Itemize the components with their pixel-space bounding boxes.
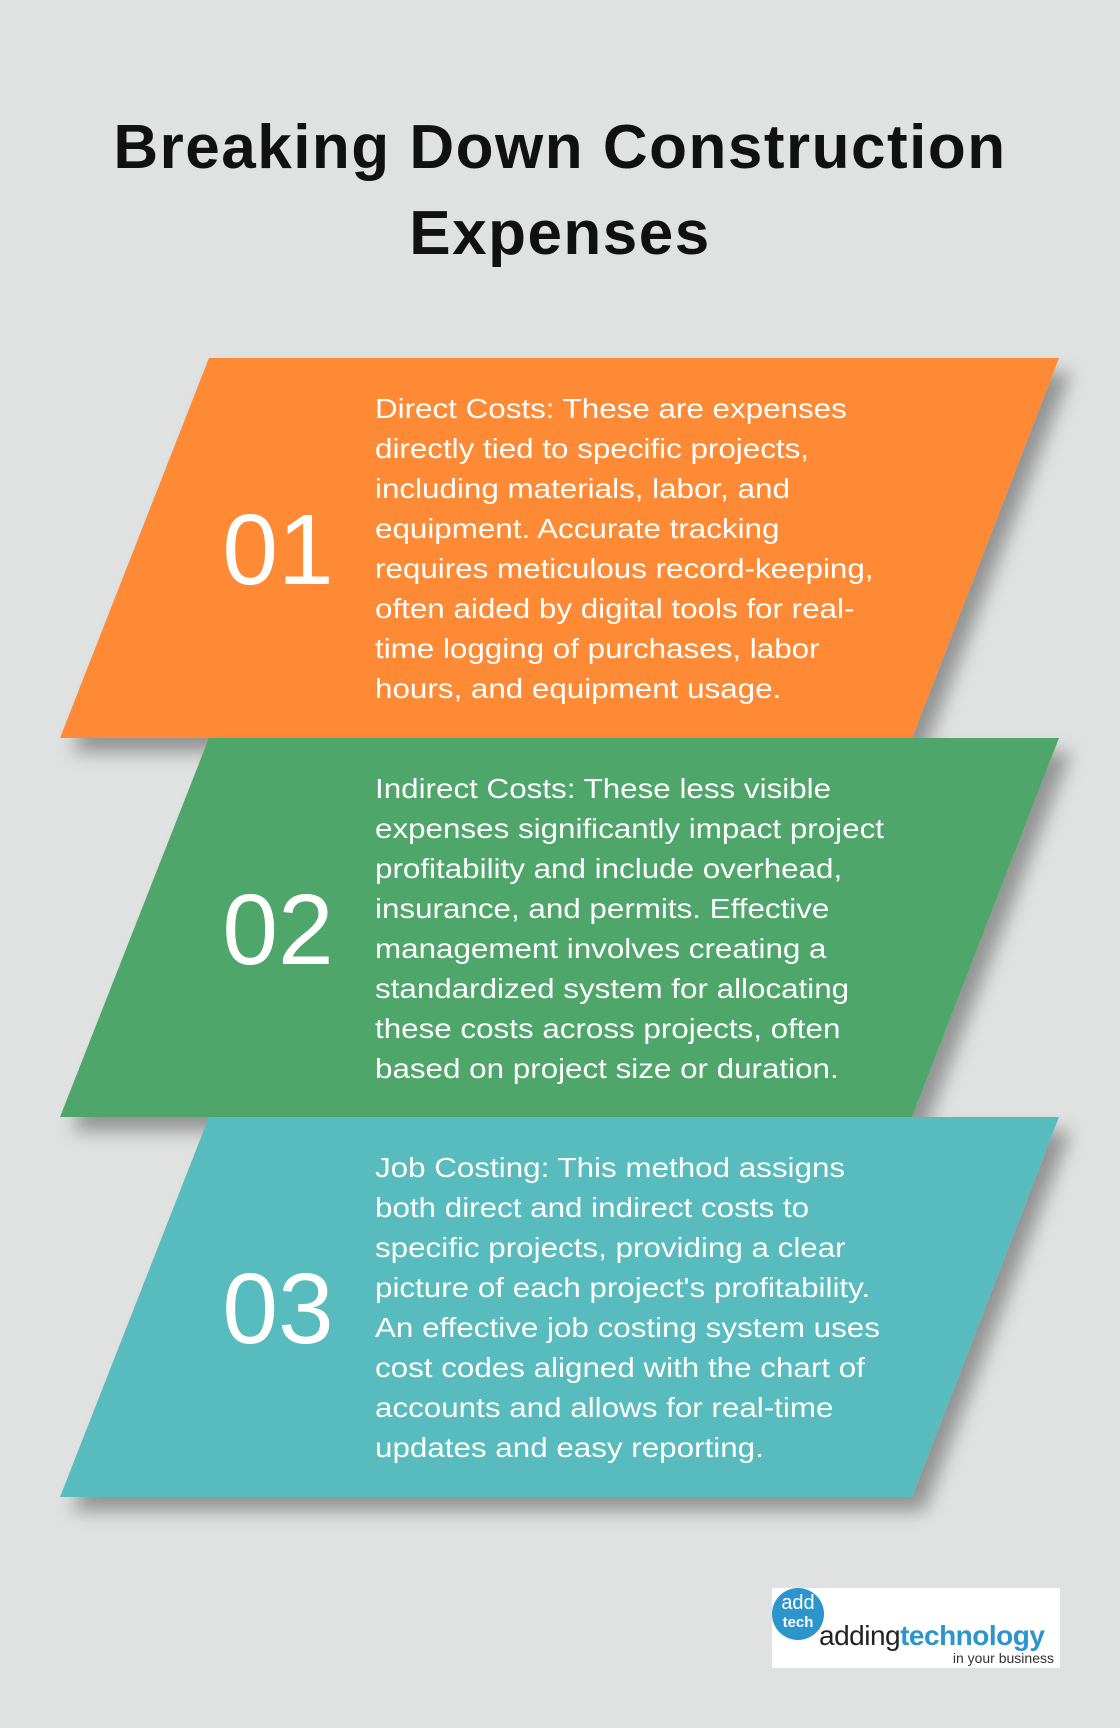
panel 3 text: both direct and indirect costs to — [375, 1192, 809, 1223]
panel 3 number: 03 — [222, 1253, 334, 1365]
panel 2 text: management involves creating a — [375, 933, 826, 964]
panel 3 text — [375, 1152, 880, 1463]
panel 2 text: these costs across projects, often — [375, 1013, 840, 1044]
panel 1 text: directly tied to specific projects, — [375, 433, 809, 464]
panel 3 text: specific projects, providing a clear — [375, 1232, 846, 1263]
panel 3 text: picture of each project's profitability. — [375, 1272, 870, 1303]
panel 2 text: insurance, and permits. Effective — [375, 893, 829, 924]
title: Breaking Down Construction — [113, 113, 1007, 182]
panel 3 text: cost codes aligned with the chart of — [375, 1352, 865, 1383]
logo tagline: in your business — [953, 1650, 1054, 1666]
panel shape: direct costs — [60, 358, 1059, 738]
panel 2 number: 02 — [222, 874, 334, 986]
panel 2 text — [375, 773, 884, 1084]
panel 2 text: Indirect Costs: These less visible — [375, 773, 831, 804]
panel 2 text: based on project size or duration. — [375, 1053, 839, 1084]
panel 1 text: requires meticulous record-keeping, — [375, 553, 874, 584]
logo circle — [772, 1588, 824, 1640]
title — [113, 113, 1007, 268]
panel 1 text: often aided by digital tools for real- — [375, 593, 854, 624]
panel 1 text — [375, 393, 874, 704]
logo — [772, 1588, 1060, 1668]
title: Expenses — [409, 199, 711, 268]
panel 2 text: expenses significantly impact project — [375, 813, 884, 844]
panel 3 text: Job Costing: This method assigns — [375, 1152, 845, 1183]
logo circle: add — [781, 1592, 815, 1614]
panel 3 text: An effective job costing system uses — [375, 1312, 880, 1343]
logo wordmark: addingtechnology — [819, 1620, 1044, 1651]
panel 1 text: Direct Costs: These are expenses — [375, 393, 847, 424]
panel 1 number: 01 — [222, 494, 334, 606]
panel 3 text: updates and easy reporting. — [375, 1432, 764, 1463]
panel 1 text: time logging of purchases, labor — [375, 633, 820, 664]
panel 2 text: standardized system for allocating — [375, 973, 849, 1004]
panel 1 text: equipment. Accurate tracking — [375, 513, 779, 544]
logo circle: tech — [783, 1614, 813, 1631]
panel 1 text: hours, and equipment usage. — [375, 673, 781, 704]
panel 3 text: accounts and allows for real-time — [375, 1392, 833, 1423]
panel 2 text: profitability and include overhead, — [375, 853, 842, 884]
panel 1 text: including materials, labor, and — [375, 473, 790, 504]
panel shape: job costing — [60, 1117, 1059, 1497]
panel shape: indirect costs — [60, 738, 1059, 1117]
